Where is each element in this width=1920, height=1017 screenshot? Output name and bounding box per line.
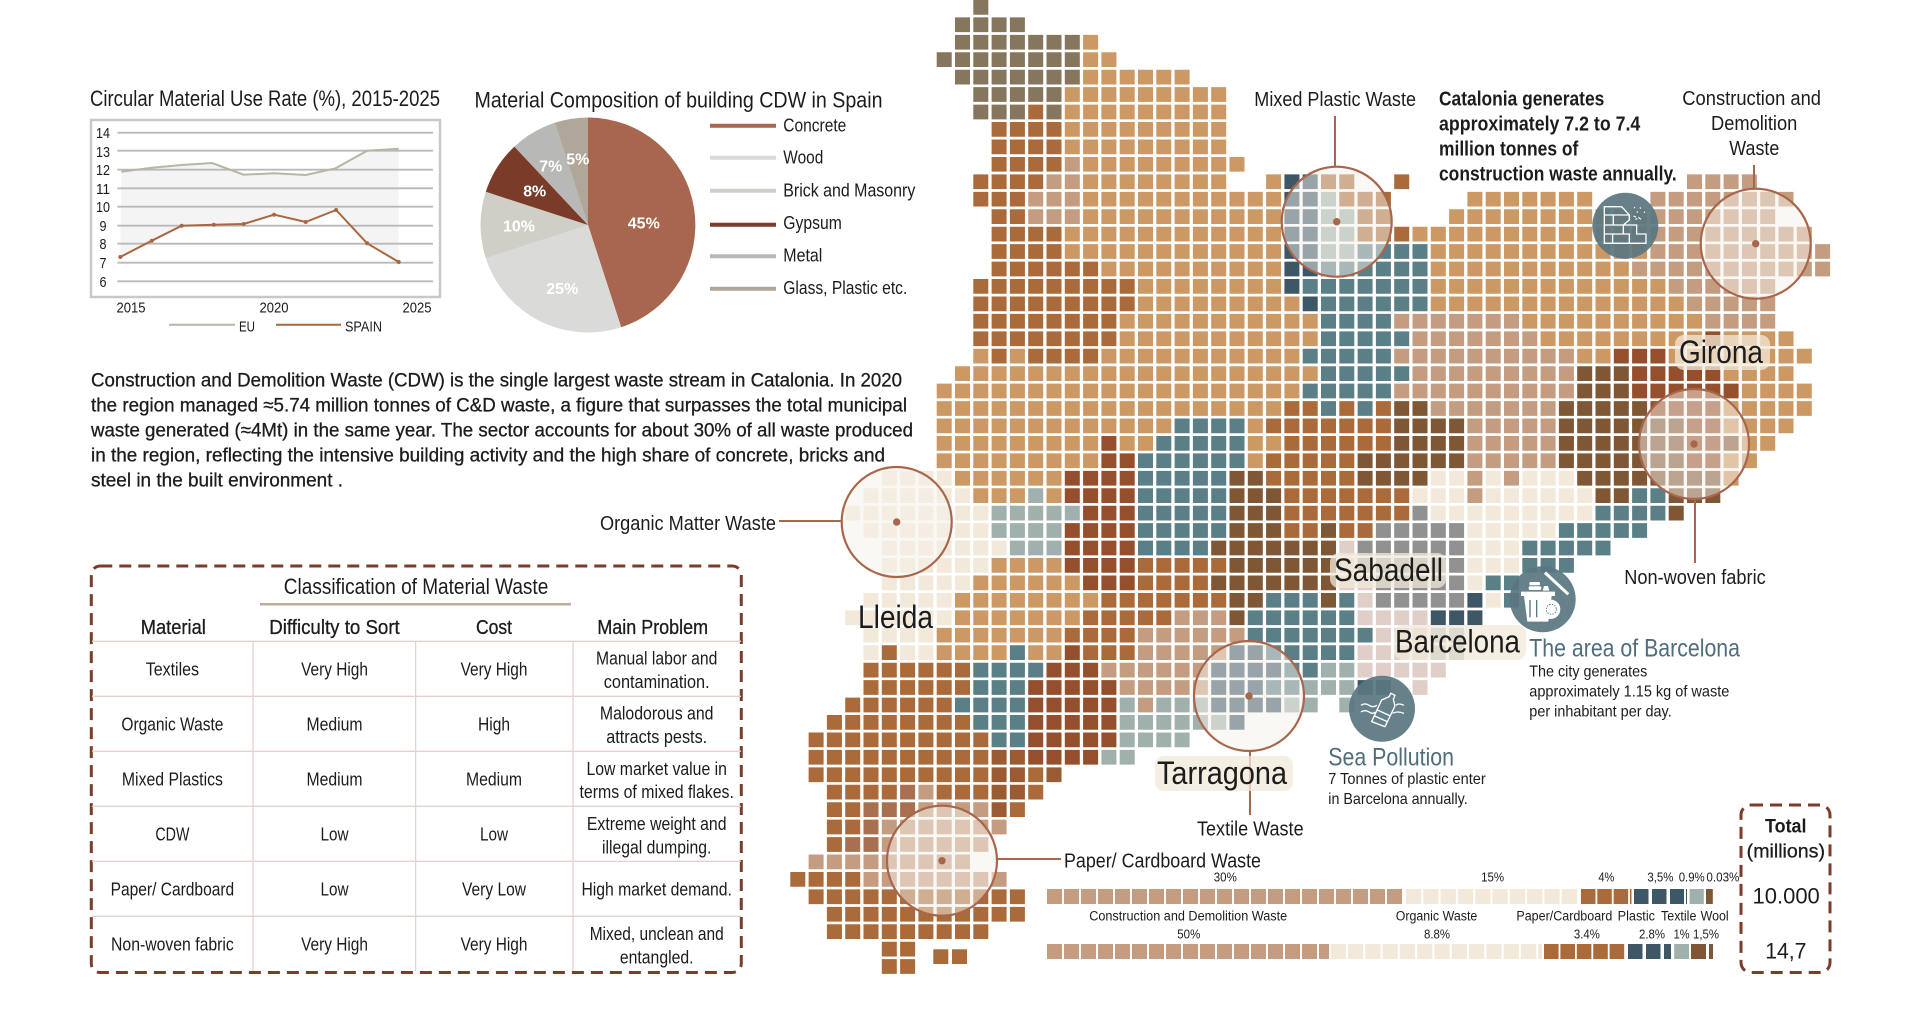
table rows: High market demand. xyxy=(581,880,732,900)
table rows: CDW xyxy=(155,825,189,845)
callout: paper and cardboard waste: Paper/ Cardboard Waste xyxy=(1064,850,1261,872)
stacked bars: waste share by type: 15% xyxy=(1481,871,1504,885)
callout: construction and demolition waste: Construction and xyxy=(1682,88,1821,110)
table header row: Difficulty to Sort xyxy=(269,617,400,639)
stacked bars: waste share by type: Textile xyxy=(1661,909,1696,924)
line chart: EU vs Spain circular material use: 8 xyxy=(100,236,106,253)
total panel: millions: (millions) xyxy=(1747,842,1825,863)
table rows: Very High xyxy=(301,660,368,680)
stacked bars: waste share by type: 3,5% xyxy=(1647,871,1673,885)
stacked bars: waste share by type: 2.8% xyxy=(1639,928,1665,942)
text block: sea pollution: in Barcelona annually. xyxy=(1328,791,1468,808)
line chart: EU vs Spain circular material use: 2015 xyxy=(116,300,146,317)
city label: Sabadell: Sabadell xyxy=(1334,552,1443,588)
table rows: Medium xyxy=(466,770,522,790)
pie chart: material composition: 7% xyxy=(539,159,562,176)
table header row: Material xyxy=(141,617,206,639)
table rows: Very Low xyxy=(462,880,527,900)
table rows: Low xyxy=(480,825,509,845)
callout: mixed plastic waste: Mixed Plastic Waste xyxy=(1254,89,1416,111)
line chart: EU vs Spain circular material use: EU xyxy=(239,319,255,336)
table rows: Low market value in xyxy=(586,759,727,779)
text block: Catalonia generates: construction waste annually. xyxy=(1439,164,1677,186)
stacked bars: waste share by type: 3.4% xyxy=(1574,928,1600,942)
icon: plastic bottle in the sea xyxy=(1349,676,1415,742)
text block: CDW introduction xyxy=(90,370,913,492)
total panel: millions: 10.000 xyxy=(1752,883,1820,908)
line chart: EU vs Spain circular material use: 2020 xyxy=(260,300,288,317)
table rows: Medium xyxy=(306,770,362,790)
text block: Catalonia generates: Catalonia generates xyxy=(1439,89,1604,111)
callout: organic matter waste xyxy=(600,467,952,577)
city label: Barcelona: Barcelona xyxy=(1395,624,1520,660)
city label: Girona: Girona xyxy=(1679,334,1763,370)
text block: Catalonia generates xyxy=(1439,89,1677,186)
line chart: EU vs Spain circular material use xyxy=(91,120,440,336)
pie legend: Gypsum xyxy=(783,213,842,233)
stacked bars: waste share by type xyxy=(1047,871,1739,952)
text block: CDW introduction: the region managed ≈5.74 million tonnes of C&D waste, a figure that surpasses the total municipal xyxy=(91,395,907,417)
map: Catalonia waste pixel grid xyxy=(790,7,1833,967)
stacked bars: waste share by type: 0.9% xyxy=(1679,871,1705,885)
stacked bars: waste share by type: 4% xyxy=(1598,871,1614,885)
table rows xyxy=(111,649,734,967)
table rows: Medium xyxy=(306,715,362,735)
text block: the area of Barcelona: The area of Barcelona xyxy=(1529,635,1740,663)
pie legend xyxy=(710,116,915,298)
table title: Classification of Material Waste xyxy=(284,574,548,599)
table rows: Malodorous and xyxy=(600,704,714,724)
stacked bars: waste share by type: 1,5% xyxy=(1693,928,1719,942)
callout: mixed plastic waste xyxy=(1254,89,1416,277)
stacked bars: waste share by type: 8.8% xyxy=(1424,928,1450,942)
text block: the area of Barcelona: approximately 1.15 kg of waste xyxy=(1529,684,1729,701)
table rows: Manual labor and xyxy=(596,649,717,669)
text block: the area of Barcelona xyxy=(1529,635,1740,721)
table rows: Mixed, unclean and xyxy=(590,924,724,944)
line chart: EU vs Spain circular material use: 10 xyxy=(96,199,110,216)
table rows: Paper/ Cardboard xyxy=(111,880,234,900)
pie legend: Glass, Plastic etc. xyxy=(783,278,907,298)
line chart: EU vs Spain circular material use: 11 xyxy=(96,181,110,198)
total panel: millions: Total xyxy=(1765,817,1806,838)
text block: the area of Barcelona: per inhabitant per day. xyxy=(1529,704,1672,721)
pie chart: material composition: 8% xyxy=(523,184,546,201)
stacked bars: waste share by type: Wool xyxy=(1701,909,1729,924)
table rows: attracts pests. xyxy=(606,727,707,747)
callout: non-woven fabric: Non-woven fabric xyxy=(1624,567,1766,589)
table rows: Very High xyxy=(461,935,527,955)
table rows: Very High xyxy=(301,935,368,955)
table rows: Non-woven fabric xyxy=(111,935,234,955)
callout: textile waste: Textile Waste xyxy=(1197,819,1304,841)
table rows: Very High xyxy=(461,660,527,680)
table rows: High xyxy=(478,715,510,735)
line chart: EU vs Spain circular material use: 13 xyxy=(96,144,110,161)
text block: Catalonia generates: million tonnes of xyxy=(1439,139,1579,161)
pie chart: material composition xyxy=(481,118,695,332)
text block: sea pollution: 7 Tonnes of plastic enter xyxy=(1328,771,1486,788)
text block: Catalonia generates: approximately 7.2 to 7.4 xyxy=(1439,114,1641,136)
text block: sea pollution: Sea Pollution xyxy=(1328,744,1454,772)
stacked bars: waste share by type: 1% xyxy=(1674,928,1690,942)
callout: organic matter waste: Organic Matter Waste xyxy=(600,513,776,535)
city label: Lleida: Lleida xyxy=(858,599,933,635)
pie chart: material composition: 5% xyxy=(566,151,589,168)
text block: sea pollution xyxy=(1328,744,1486,808)
icon: brick wall xyxy=(1592,193,1658,259)
table rows: illegal dumping. xyxy=(602,837,711,857)
table header row: Cost xyxy=(476,617,512,639)
callout: construction and demolition waste: Waste xyxy=(1729,138,1779,160)
pie legend: Brick and Masonry xyxy=(783,181,915,201)
total panel: millions xyxy=(1741,805,1830,972)
stacked bars: waste share by type: 50% xyxy=(1177,928,1200,942)
table rows: entangled. xyxy=(620,947,694,967)
line chart: EU vs Spain circular material use: 2025 xyxy=(402,300,432,317)
callout: construction and demolition waste xyxy=(1682,88,1821,299)
table rows: contamination. xyxy=(604,672,710,692)
stacked bars: waste share by type: Plastic xyxy=(1618,909,1655,924)
heading: material composition: Material Composition of building CDW in Spain xyxy=(474,87,882,112)
text block: CDW introduction: waste generated (≈4Mt) in the same year. The sector accounts for about 30% of all waste produced xyxy=(90,420,913,442)
text block: the area of Barcelona: The city generates xyxy=(1529,664,1647,681)
line chart: EU vs Spain circular material use: SPAIN xyxy=(345,319,382,336)
stacked bars: waste share by type: 0.03% xyxy=(1706,871,1739,885)
table rows: Mixed Plastics xyxy=(122,770,223,790)
stacked bars: waste share by type: 30% xyxy=(1214,871,1237,885)
pie chart: material composition: 25% xyxy=(546,281,578,298)
line chart: EU vs Spain circular material use: 9 xyxy=(100,218,106,235)
callout: textile waste xyxy=(1194,641,1304,841)
total panel: millions: 14,7 xyxy=(1765,939,1806,964)
pie legend: Metal xyxy=(783,246,822,266)
line chart: EU vs Spain circular material use: 6 xyxy=(100,274,106,291)
table panel: classification of material waste xyxy=(91,566,741,972)
stacked bars: waste share by type: Paper/Cardboard xyxy=(1516,909,1612,924)
callout: paper and cardboard waste xyxy=(887,806,1261,916)
table header row: Main Problem xyxy=(597,617,708,639)
line chart: EU vs Spain circular material use: 14 xyxy=(96,125,110,142)
pie chart: material composition: 45% xyxy=(628,215,660,232)
table rows: Low xyxy=(320,880,349,900)
table rows: Organic Waste xyxy=(121,715,223,735)
line chart: EU vs Spain circular material use: 12 xyxy=(96,162,110,179)
text block: CDW introduction: steel in the built environment . xyxy=(91,470,343,492)
table rows: Low xyxy=(320,825,349,845)
table rows: terms of mixed flakes. xyxy=(580,782,734,802)
table header row xyxy=(141,617,708,639)
heading: circular material use rate: Circular Material Use Rate (%), 2015-2025 xyxy=(90,86,440,111)
callout: construction and demolition waste: Demolition xyxy=(1711,113,1797,135)
text block: CDW introduction: in the region, reflecting the intensive building activity and the high share of concrete, bricks and xyxy=(91,445,885,467)
icon: waste bin xyxy=(1510,566,1576,632)
stacked bars: waste share by type: Organic Waste xyxy=(1396,909,1477,924)
text block: CDW introduction: Construction and Demolition Waste (CDW) is the single largest waste stream in Catalonia. In 2020 xyxy=(91,370,902,392)
table rows: Textiles xyxy=(146,660,199,680)
callout: non-woven fabric xyxy=(1624,389,1766,589)
pie legend: Wood xyxy=(783,147,823,167)
stacked bars: waste share by type: Construction and Demolition Waste xyxy=(1089,909,1287,924)
city label: Tarragona: Tarragona xyxy=(1157,755,1287,791)
table rows: Extreme weight and xyxy=(587,814,726,834)
pie legend: Concrete xyxy=(783,116,846,136)
pie chart: material composition: 10% xyxy=(503,219,535,236)
line chart: EU vs Spain circular material use: 7 xyxy=(100,255,106,272)
